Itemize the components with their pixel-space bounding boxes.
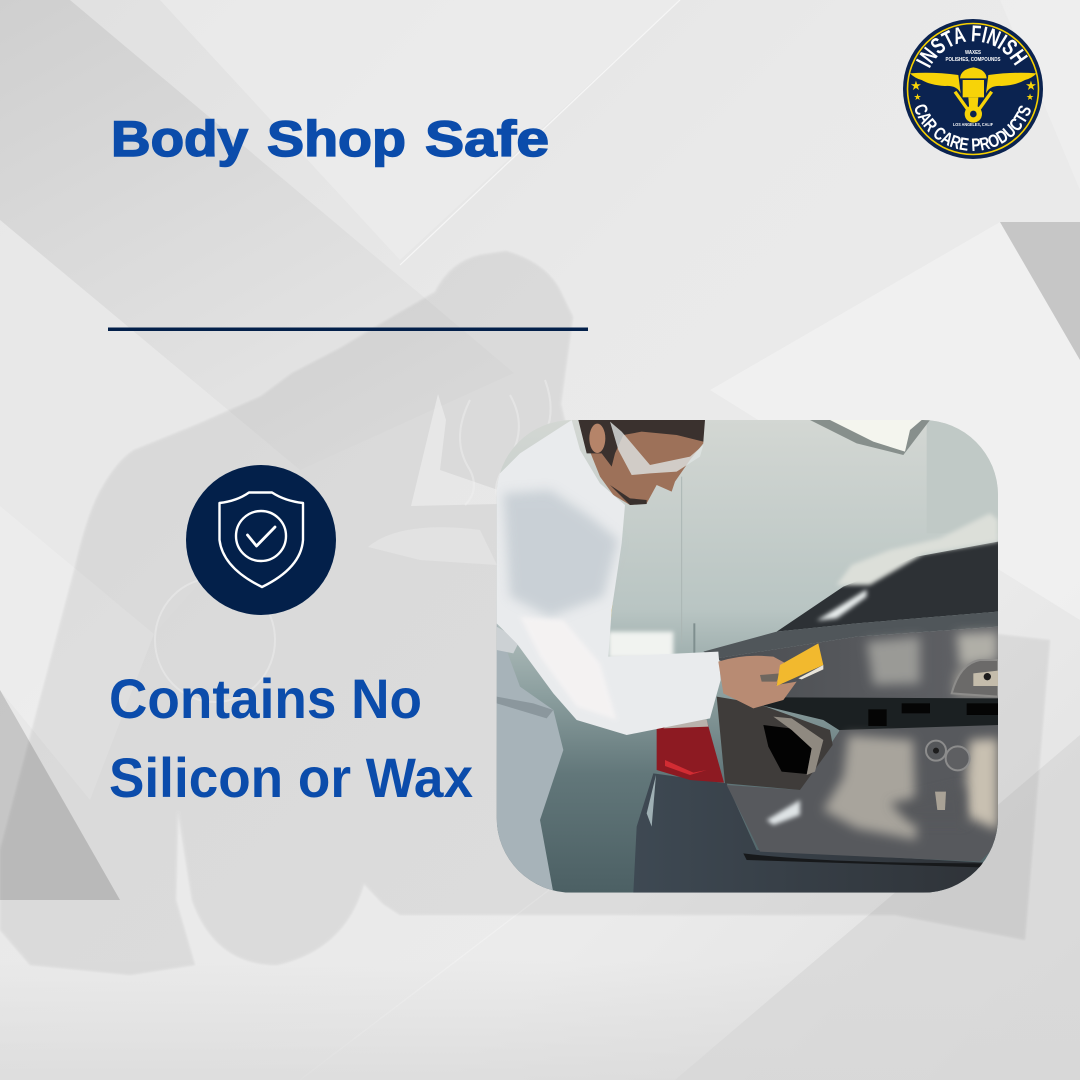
title: Safe — [425, 111, 549, 167]
body text: Contains No Silicon or Wax — [109, 667, 473, 809]
logo stars — [910, 78, 1037, 102]
logo text: CAR CARE PRODUCTS — [914, 104, 1031, 151]
logo text: LOS ANGELES, CALIF — [953, 122, 993, 127]
logo stars: ★ — [913, 92, 922, 102]
title — [111, 111, 549, 167]
technician — [497, 420, 823, 893]
logo text — [914, 25, 1031, 151]
silhouette: woman and car — [0, 251, 1050, 975]
logo stars: ★ — [910, 78, 922, 93]
logo wings and piston — [910, 67, 1037, 123]
logo stars: ★ — [1026, 92, 1034, 102]
title: Shop — [267, 111, 406, 167]
logo text: POLISHES, COMPOUNDS — [946, 57, 1001, 63]
car — [633, 513, 998, 893]
logo text: INSTA FINISH — [916, 25, 1028, 68]
photo: technician inspecting car trunk — [497, 420, 998, 893]
silhouette highlights — [155, 380, 551, 702]
body text: Contains No Silicon or Wax: Silicon or Wax — [109, 746, 473, 809]
title: Body — [111, 111, 248, 167]
icon: shield with check — [186, 465, 336, 615]
logo text: WAXES — [965, 50, 981, 56]
logo: Insta Finish Car Care Products — [903, 19, 1043, 159]
body text: Contains No Silicon or Wax: Contains No — [109, 667, 422, 730]
logo stars: ★ — [1025, 78, 1037, 93]
divider line — [108, 328, 588, 331]
booth wall — [497, 420, 998, 893]
